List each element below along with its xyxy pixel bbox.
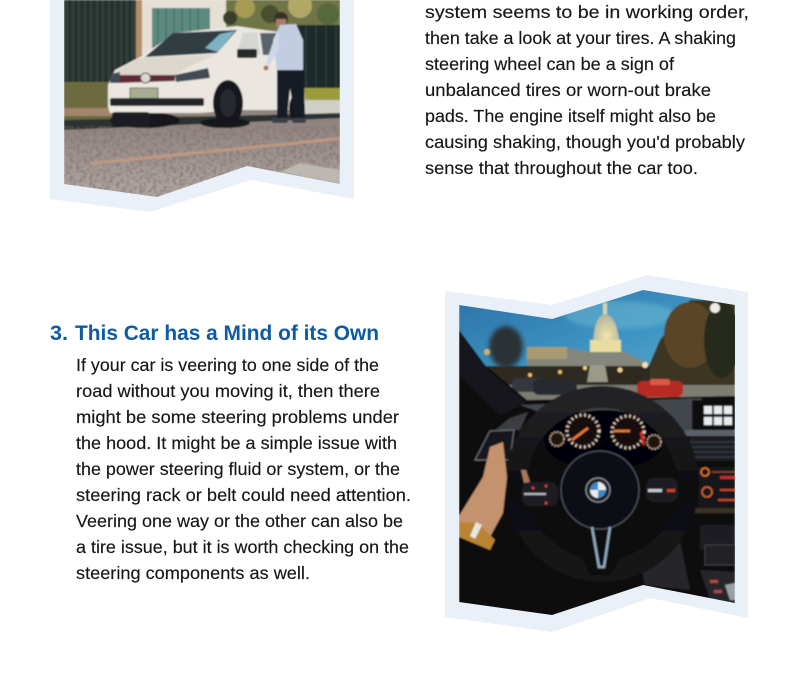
cars outside	[512, 378, 542, 392]
photo: car interior with capitol view	[459, 285, 740, 620]
photo: man beside white car	[64, 0, 340, 203]
radio	[698, 467, 735, 507]
photo frame	[445, 275, 748, 632]
text block: shaking steering wheel	[425, 2, 749, 178]
text block: shaking steering wheel: unbalanced tires or worn-out brake	[425, 80, 711, 100]
photo card: steering wheel	[445, 275, 748, 632]
text block: steering problems: road without you moving it, then there	[76, 381, 380, 401]
wrist band	[459, 522, 495, 550]
spokes	[517, 472, 685, 575]
photo frame	[50, 0, 354, 212]
text block: steering problems: might be some steering problems under	[76, 407, 399, 427]
text block: shaking steering wheel: pads. The engine itself might also be	[425, 106, 716, 126]
screen	[692, 400, 735, 430]
text block: shaking steering wheel: system seems to be in working order,	[425, 2, 749, 22]
instrument cluster	[544, 410, 664, 470]
text block: steering problems: Veering one way or the other can also be	[76, 511, 403, 531]
text block: shaking steering wheel: causing shaking, though you'd probably	[425, 132, 745, 152]
text block: shaking steering wheel: then take a look at your tires. A shaking	[425, 28, 736, 48]
dash and cabin	[459, 330, 735, 620]
text block: steering problems: the hood. It might be a simple issue with	[76, 433, 397, 453]
steering wheel rim	[516, 397, 688, 571]
vents	[690, 437, 735, 461]
text block: steering problems: the power steering fluid or system, or the	[76, 459, 400, 479]
man	[274, 12, 288, 26]
hub	[561, 451, 639, 529]
text block: steering problems: a tire issue, but it is worth checking on the	[76, 537, 409, 557]
text block: steering problems: steering rack or belt could need attention.	[76, 485, 411, 505]
photo card: white car on street	[50, 0, 354, 212]
car	[110, 112, 180, 128]
hand	[459, 442, 507, 537]
text block: steering problems: steering components as well.	[76, 563, 310, 583]
heading: section 3: 3.	[50, 322, 68, 345]
BMW logo	[586, 478, 610, 502]
text block: shaking steering wheel: steering wheel can be a sign of	[425, 54, 674, 74]
lower spoke trim	[592, 527, 610, 567]
text block: shaking steering wheel: sense that throughout the car too.	[425, 158, 698, 178]
heading: section 3: This Car has a Mind of its Own	[75, 322, 379, 345]
wheel buttons	[522, 482, 558, 506]
trees	[489, 326, 523, 368]
text block: steering problems	[76, 355, 411, 583]
capitol	[526, 347, 645, 368]
text block: steering problems: If your car is veering to one side of the	[76, 355, 379, 375]
